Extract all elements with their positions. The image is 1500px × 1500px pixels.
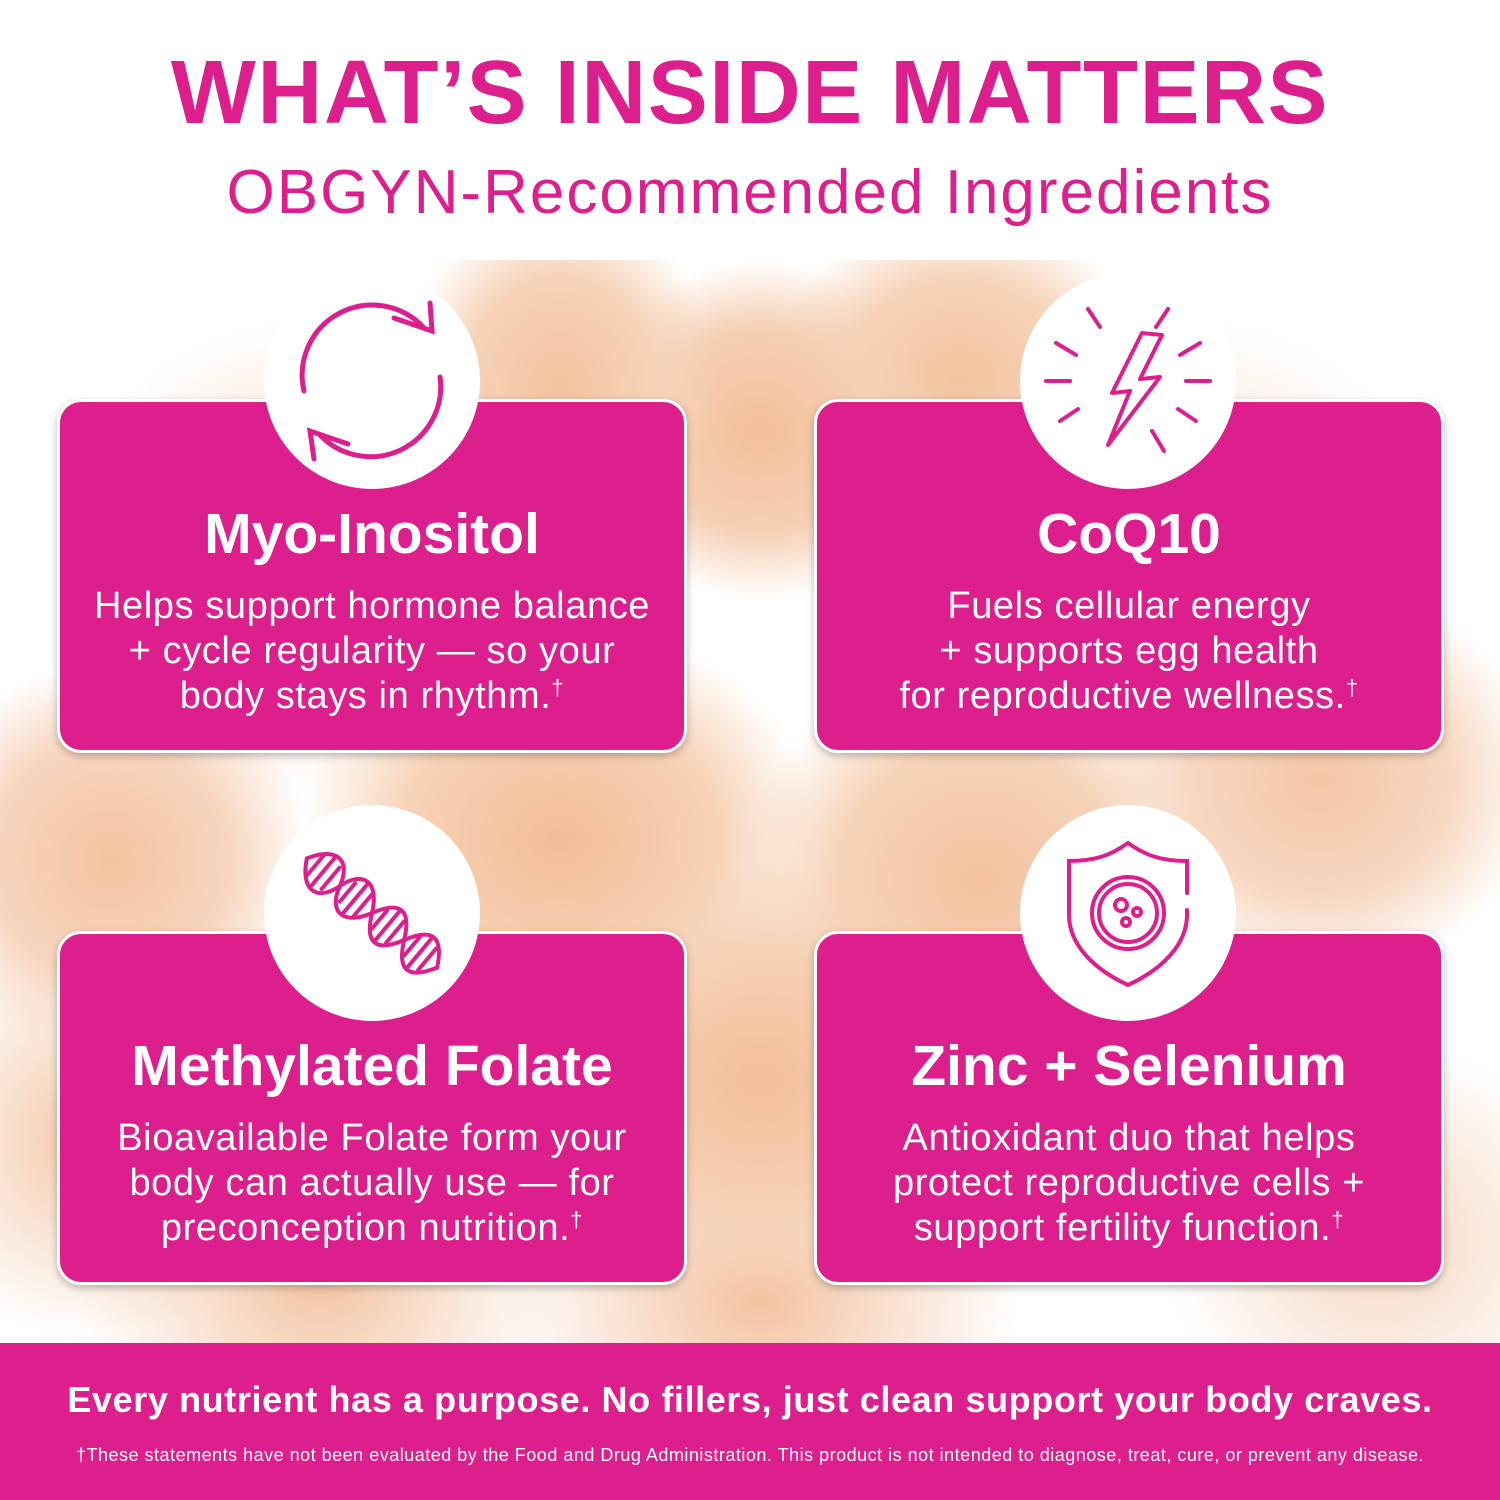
text: folate description: body can actually use — for bbox=[129, 1162, 615, 1204]
panel: myo-inositol bbox=[57, 399, 687, 753]
text: zinc description: support fertility function.† bbox=[914, 1207, 1344, 1249]
banner: footer bbox=[0, 1343, 1500, 1500]
text: tagline: Every nutrient has a purpose. No fillers, just clean support your body craves. bbox=[67, 1379, 1433, 1420]
text: coq10 description bbox=[899, 585, 1359, 717]
text: myo-inositol description: + cycle regularity — so your bbox=[129, 630, 615, 672]
text: zinc description bbox=[893, 1117, 1365, 1249]
text: folate description: preconception nutrition.† bbox=[161, 1207, 583, 1249]
subtitle: OBGYN-Recommended Ingredients bbox=[226, 158, 1274, 227]
icon: shield cell bbox=[1020, 805, 1236, 1021]
text: folate description bbox=[117, 1117, 627, 1249]
panel: coq10 bbox=[814, 399, 1444, 753]
text: myo-inositol description: body stays in rhythm.† bbox=[180, 675, 564, 717]
text: coq10 description: + supports egg health bbox=[939, 630, 1319, 672]
text: myo-inositol description bbox=[94, 585, 650, 717]
heading: methylated folate: Methylated Folate bbox=[131, 1034, 613, 1098]
icon: cycle arrows bbox=[264, 273, 480, 489]
text: zinc description: protect reproductive cells + bbox=[893, 1162, 1365, 1204]
icon: dna bbox=[264, 805, 480, 1021]
text: disclaimer: †These statements have not been evaluated by the Food and Drug Administration. This product is not intended to diagnose, treat, cure, or prevent any disease. bbox=[76, 1445, 1424, 1465]
title: WHAT’S INSIDE MATTERS bbox=[171, 43, 1329, 143]
heading: myo-inositol: Myo-Inositol bbox=[204, 502, 540, 566]
text: folate description: Bioavailable Folate form your bbox=[117, 1117, 627, 1159]
panel: zinc + selenium bbox=[814, 931, 1444, 1285]
text: myo-inositol description: Helps support hormone balance bbox=[94, 585, 650, 627]
text: zinc description: Antioxidant duo that helps bbox=[903, 1117, 1355, 1159]
heading: zinc + selenium: Zinc + Selenium bbox=[911, 1034, 1347, 1098]
heading: coq10: CoQ10 bbox=[1037, 502, 1221, 566]
panel: methylated folate bbox=[57, 931, 687, 1285]
text: coq10 description: Fuels cellular energy bbox=[947, 585, 1311, 627]
icon: lightning bbox=[1020, 273, 1236, 489]
text: coq10 description: for reproductive wellness.† bbox=[899, 675, 1359, 717]
